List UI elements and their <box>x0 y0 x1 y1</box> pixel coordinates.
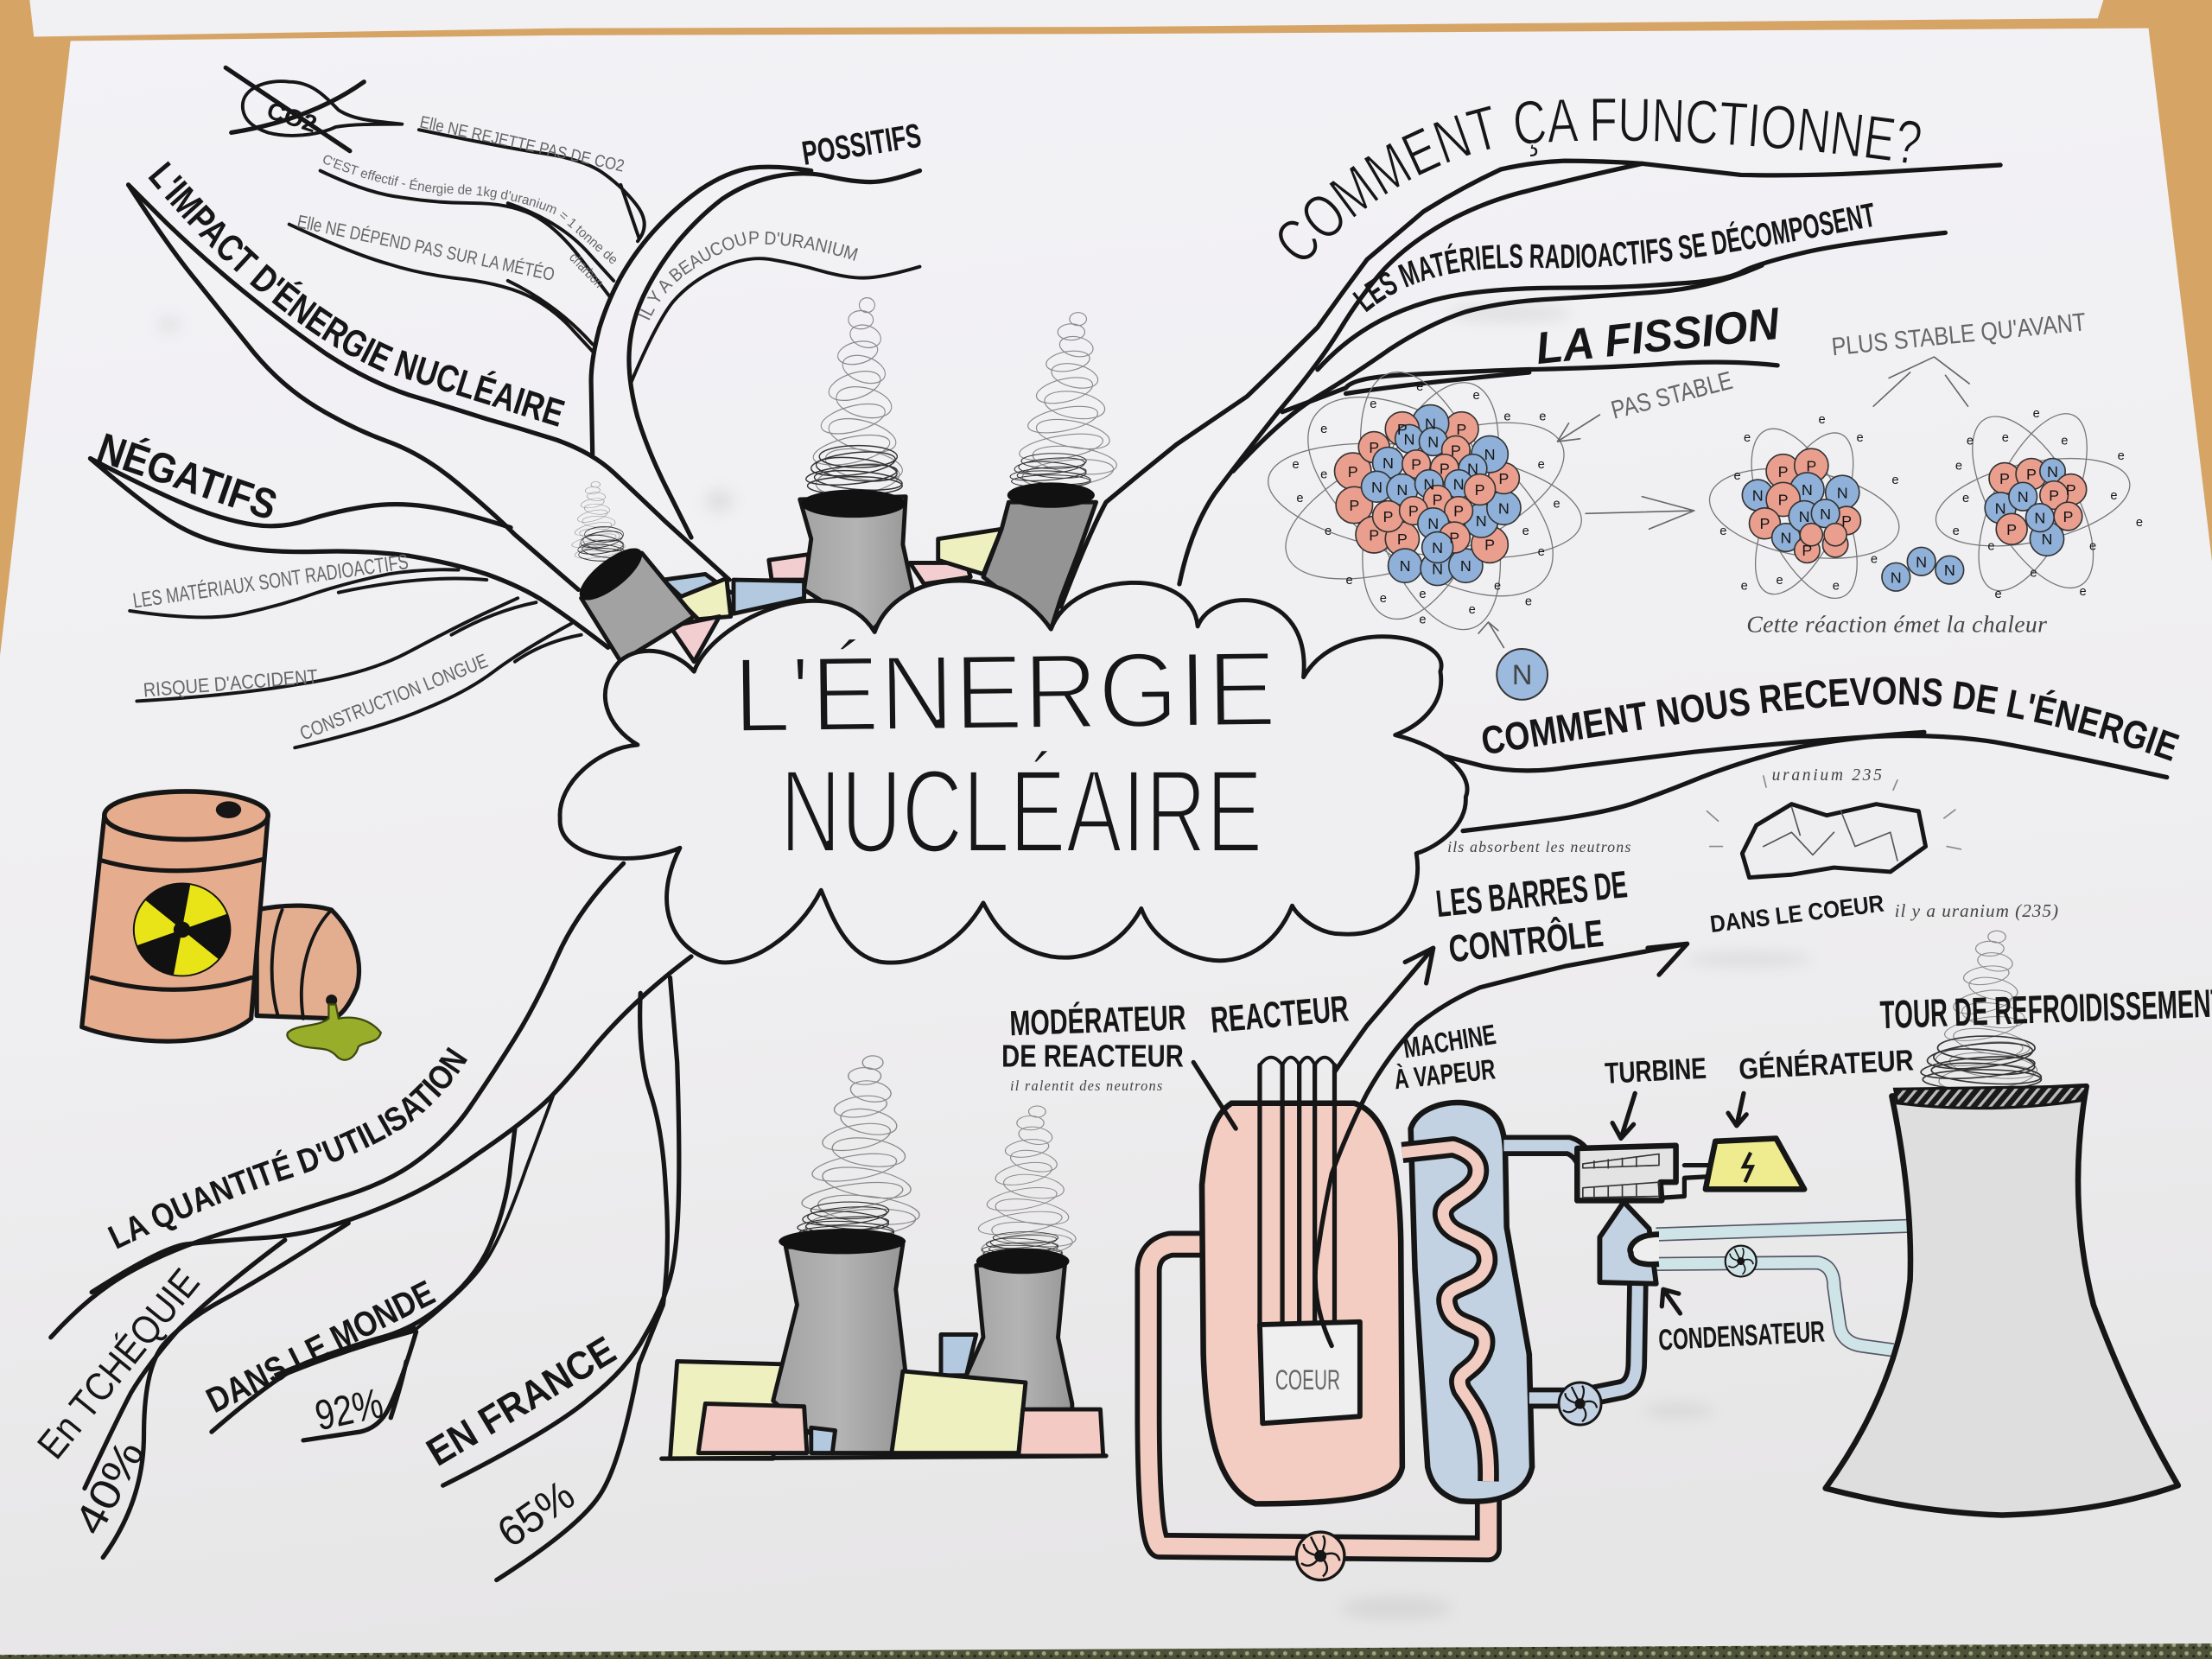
diagram: daughter atom right: N <box>2034 510 2045 527</box>
value: 92 percent: 92% <box>311 1380 387 1440</box>
diagram: daughter atom left: P <box>1841 512 1852 530</box>
diagram: daughter atom right: e <box>2061 434 2068 448</box>
label: moderateur: DE REACTEUR <box>1001 1038 1184 1073</box>
diagram: daughter atom left: e <box>1741 579 1748 593</box>
diagram: daughter atom right: e <box>1967 434 1974 448</box>
diagram: primary loop pipe <box>1148 1244 1488 1549</box>
value: 65 percent: 65% <box>489 1471 583 1557</box>
diagram: large unstable atom: e <box>1538 545 1545 559</box>
diagram: daughter atom left: e <box>1891 474 1899 487</box>
diagram: large unstable atom: e <box>1554 498 1560 512</box>
diagram: large unstable atom: e <box>1522 524 1529 538</box>
upper cooling towers <box>563 298 1118 662</box>
label: negatifs: NÉGATIFS <box>92 425 283 530</box>
diagram: large unstable atom: N <box>1427 515 1439 532</box>
label: control rods <box>1434 863 1630 970</box>
note: long construction: CONSTRUCTION LONGUE <box>296 649 491 745</box>
branch: usage quantities <box>51 863 691 1580</box>
diagram: large unstable atom: N <box>1498 499 1510 517</box>
diagram: large unstable atom: e <box>1539 410 1546 424</box>
branch: how we receive energy <box>1445 732 2167 831</box>
diagram: daughter atom left: P <box>1802 542 1812 559</box>
diagram: daughter atom right: e <box>2089 540 2096 554</box>
diagram: daughter atom left: P <box>1778 491 1789 508</box>
label: moderateur <box>1001 997 1186 1094</box>
diagram: secondary steam pipes <box>1503 1146 1638 1398</box>
diagram: large unstable atom: P <box>1451 442 1461 459</box>
diagram: large unstable atom: N <box>1423 476 1434 493</box>
central cloud <box>560 581 1467 963</box>
diagram: turbine <box>1577 1146 1713 1200</box>
branch: negatives <box>90 459 608 747</box>
diagram: daughter atom left: e <box>1719 524 1726 538</box>
icon: uranium ore <box>1707 776 1961 878</box>
label: positifs: POSSITIFS <box>799 118 924 173</box>
diagram: large unstable atom: P <box>1440 461 1450 478</box>
label: control rods: CONTRÔLE <box>1446 911 1605 970</box>
diagram: daughter atom right: N <box>2047 463 2058 480</box>
diagram: large unstable atom: N <box>1467 461 1478 478</box>
diagram: cooling pipes <box>1656 1226 1910 1350</box>
diagram: large unstable atom: P <box>1484 537 1495 554</box>
diagram: large unstable atom: P <box>1498 470 1509 487</box>
heading: comment nous recevons: COMMENT NOUS RECEVONS DE L'ÉNERGIE <box>1483 677 2179 761</box>
diagram: large unstable atom: P <box>1369 439 1379 456</box>
diagram: large unstable atom: e <box>1494 579 1501 593</box>
note: heat emission: Cette réaction émet la chaleur <box>1746 611 2047 638</box>
diagram: daughter atom left: P <box>1778 463 1789 480</box>
label: moderateur: MODÉRATEUR <box>1009 997 1186 1043</box>
label: control rods: LES BARRES DE <box>1434 863 1630 925</box>
diagram: daughter atom right: e <box>2030 567 2037 581</box>
diagram: large unstable atom: P <box>1449 530 1459 547</box>
note: radioactive materials: LES MATÉRIAUX SONT RADIOACTIFS <box>131 550 410 613</box>
diagram: large unstable atom: e <box>1503 410 1511 424</box>
label: machine a vapeur <box>1393 1018 1498 1095</box>
label: machine a vapeur: À VAPEUR <box>1393 1052 1497 1095</box>
arrows: reactor pointers <box>1193 944 1746 1346</box>
diagram: daughter atom right: P <box>2063 508 2073 525</box>
diagram: daughter atom left: N <box>1820 505 1831 523</box>
diagram: daughter atom left: N <box>1780 530 1791 547</box>
diagram: large unstable atom: N <box>1382 454 1394 472</box>
diagram: daughter atom left: e <box>1871 552 1878 566</box>
diagram: daughter atom right: e <box>1953 524 1960 538</box>
title: NUCLÉAIRE <box>780 746 1262 878</box>
label: quantity of use: LA QUANTITÉ D'UTILISATION <box>107 1047 467 1249</box>
diagram: large unstable atom: N <box>1396 481 1408 499</box>
diagram: daughter atom right: e <box>2033 407 2040 421</box>
diagram: large unstable atom: e <box>1525 594 1532 608</box>
icon: cooling pump <box>1726 1246 1757 1277</box>
icon: primary pump <box>1296 1532 1344 1580</box>
diagram: daughter atom right: e <box>1987 540 1995 554</box>
note: uranium: IL Y A BEAUCOUP D'URANIUM <box>638 232 858 320</box>
diagram: daughter atom left: e <box>1777 574 1783 588</box>
released neutrons: N <box>1944 562 1955 579</box>
diagram: large unstable atom: N <box>1432 539 1443 556</box>
paper smudges <box>158 305 1813 1619</box>
diagram: large unstable atom: e <box>1320 467 1327 481</box>
label: machine a vapeur: MACHINE <box>1401 1018 1498 1064</box>
title: L'ÉNERGIE <box>733 630 1277 755</box>
label: uranium 235: uranium 235 <box>1772 766 1882 785</box>
diagram: large unstable atom: e <box>1296 492 1304 505</box>
diagram: daughter atom left: P <box>1806 457 1816 474</box>
incoming neutron with arrow <box>1478 622 1548 700</box>
arrows: more stable <box>1873 357 1969 406</box>
diagram: large unstable atom: e <box>1538 458 1545 472</box>
diagram: large unstable atom: e <box>1320 423 1327 436</box>
diagram: cooling tower <box>1826 931 2178 1515</box>
label: radioactive decay: LES MATÉRIELS RADIOACTIFS SE DÉCOMPOSENT <box>1352 202 1873 313</box>
label: plus stable: PLUS STABLE QU'AVANT <box>1830 308 2088 361</box>
label: pas stable with arrow: PAS STABLE <box>1608 366 1736 425</box>
diagram: daughter atom right: N <box>2018 488 2029 505</box>
diagram: large unstable atom: e <box>1370 397 1376 411</box>
heading: comment ca fonctionne: COMMENT ÇA FUNCTIONNE? <box>1279 99 1921 259</box>
label: en France: EN FRANCE <box>419 1328 623 1475</box>
diagram: large unstable atom: N <box>1453 476 1465 493</box>
diagram: daughter atom right: N <box>1995 499 2006 517</box>
diagram: large unstable atom: N <box>1432 560 1443 577</box>
icon: radioactive barrels <box>82 791 381 1060</box>
diagram: reactor vessel <box>1202 1058 1402 1503</box>
diagram: large unstable atom: P <box>1456 421 1466 438</box>
note: accident risk: RISQUE D'ACCIDENT <box>143 664 319 702</box>
incoming neutron with arrow: N <box>1512 658 1532 690</box>
label: dans le coeur: il y a uranium (235) <box>1895 900 2058 921</box>
note: no CO2: Elle NE REJETTE PAS DE CO2 <box>418 112 626 176</box>
label: dans le coeur <box>1708 890 2058 938</box>
diagram: large unstable atom: e <box>1416 380 1423 394</box>
branch: impact and positive effects <box>129 130 919 589</box>
diagram: daughter atom right: e <box>2136 516 2143 530</box>
label: dans le monde: DANS LE MONDE <box>200 1273 441 1421</box>
released neutrons: N <box>1916 553 1927 570</box>
label: dans le coeur: DANS LE COEUR <box>1708 890 1885 938</box>
diagram: large unstable atom: P <box>1383 508 1394 525</box>
diagram: large unstable atom: P <box>1348 463 1358 480</box>
label: reacteur: REACTEUR <box>1209 988 1351 1040</box>
diagram: daughter atom right: P <box>2066 481 2076 499</box>
diagram: daughter atom right: P <box>2026 466 2037 483</box>
diagram: large unstable atom: P <box>1397 421 1408 438</box>
label: pas stable with arrow <box>1557 366 1736 442</box>
arrow: fission reaction <box>1586 497 1694 529</box>
label: moderateur: il ralentit des neutrons <box>1010 1077 1162 1094</box>
diagram: daughter atom left: N <box>1799 508 1810 525</box>
diagram: daughter atom left: e <box>1734 469 1741 483</box>
diagram: large unstable atom: N <box>1427 434 1439 451</box>
upper paper sheet <box>29 0 2103 36</box>
diagram: daughter atom right: P <box>2049 487 2059 505</box>
floor strip <box>0 1643 2212 1659</box>
diagram: large unstable atom: P <box>1349 497 1359 514</box>
diagram: daughter atom left: P <box>1759 515 1770 532</box>
diagram: reactor vessel: COEUR <box>1275 1363 1340 1395</box>
diagram: daughter atom right: e <box>1962 492 1969 505</box>
diagram: daughter atom right: e <box>2118 449 2125 463</box>
diagram: large unstable atom: e <box>1419 613 1427 627</box>
released neutrons: N <box>1891 569 1902 586</box>
label: turbine: TURBINE <box>1604 1052 1707 1090</box>
diagram: large unstable atom: N <box>1484 446 1496 463</box>
note: effective: C'EST effectif - Énergie de 1kg d'uranium = 1 tonne de <box>323 156 616 264</box>
diagram: daughter atom right: P <box>2006 521 2017 538</box>
note: effective: charbon <box>566 250 607 291</box>
note: absorb neutrons: ils absorbent les neutrons <box>1447 838 1630 855</box>
label: generateur: GÉNÉRATEUR <box>1738 1042 1915 1086</box>
diagram: large unstable atom: e <box>1346 574 1353 588</box>
diagram: daughter atom left: e <box>1857 431 1864 445</box>
diagram: large unstable atom: N <box>1400 557 1411 575</box>
diagram: large unstable atom: N <box>1371 479 1382 496</box>
diagram: daughter atom left: N <box>1802 481 1813 499</box>
diagram: generator <box>1706 1139 1804 1189</box>
diagram: daughter atom left: N <box>1752 487 1764 505</box>
branch: how it works <box>1061 161 2000 607</box>
diagram: large unstable atom: N <box>1404 430 1415 448</box>
diagram: large unstable atom: P <box>1408 503 1419 520</box>
diagram: daughter atom right: e <box>1995 588 2002 601</box>
diagram: large unstable atom: P <box>1411 456 1421 474</box>
diagram: large unstable atom: N <box>1476 512 1487 530</box>
title <box>733 630 1277 878</box>
diagram: large unstable atom: e <box>1469 603 1476 617</box>
label: la fission: LA FISSION <box>1534 299 1783 374</box>
diagram: large unstable atom: P <box>1369 526 1379 543</box>
diagram: large unstable atom: P <box>1397 531 1408 548</box>
diagram: steam generator <box>1402 1103 1532 1502</box>
diagram: large unstable atom: e <box>1293 458 1300 472</box>
diagram: large unstable atom: P <box>1475 481 1485 499</box>
diagram: large unstable atom: e <box>1325 524 1332 538</box>
diagram: daughter atom left: e <box>1744 431 1751 445</box>
diagram: daughter atom right: e <box>2080 585 2087 599</box>
diagram: daughter atom left: e <box>1818 413 1826 427</box>
icon: crossed out CO2 cloud: CO2 <box>264 97 321 137</box>
diagram: large unstable atom: e <box>1380 592 1387 606</box>
diagram: daughter atom left <box>1702 413 1906 613</box>
diagram: large unstable atom: N <box>1425 415 1436 432</box>
diagram: daughter atom right: e <box>2002 431 2009 445</box>
diagram: condenser <box>1599 1202 1659 1284</box>
lower plant <box>662 1056 1106 1459</box>
value: 40 percent: 40% <box>66 1433 154 1542</box>
note: weather: Elle NE DÉPEND PAS SUR LA MÉTÉO <box>296 210 556 285</box>
label: condensateur: CONDENSATEUR <box>1657 1315 1826 1357</box>
diagram: daughter atom left: N <box>1837 484 1848 501</box>
label: en Tchequie: En TCHÉQUIE <box>29 1261 208 1467</box>
label: impact: L'IMPACT D'ÉNERGIE NUCLÉAIRE <box>149 161 565 427</box>
diagram: large unstable atom: P <box>1453 503 1464 520</box>
diagram: large unstable atom: P <box>1433 491 1443 508</box>
icon: secondary pump <box>1559 1382 1601 1425</box>
upper plant buildings behind cloud <box>663 529 1001 662</box>
diagram: daughter atom left: e <box>1833 579 1840 593</box>
diagram: daughter atom right: e <box>2110 489 2118 503</box>
diagram: daughter atom right: P <box>1999 470 2010 487</box>
diagram: daughter atom right: N <box>2041 531 2052 548</box>
diagram: daughter atom right: e <box>1955 460 1962 474</box>
diagram: daughter atom right <box>1928 398 2143 607</box>
diagram: large unstable atom: N <box>1460 557 1471 575</box>
icon: crossed out CO2 cloud <box>226 67 402 151</box>
diagram: large unstable atom: e <box>1419 588 1427 601</box>
released neutrons <box>1882 547 1964 591</box>
diagram: large unstable atom <box>1261 355 1589 646</box>
diagram: large unstable atom: e <box>1472 389 1480 403</box>
